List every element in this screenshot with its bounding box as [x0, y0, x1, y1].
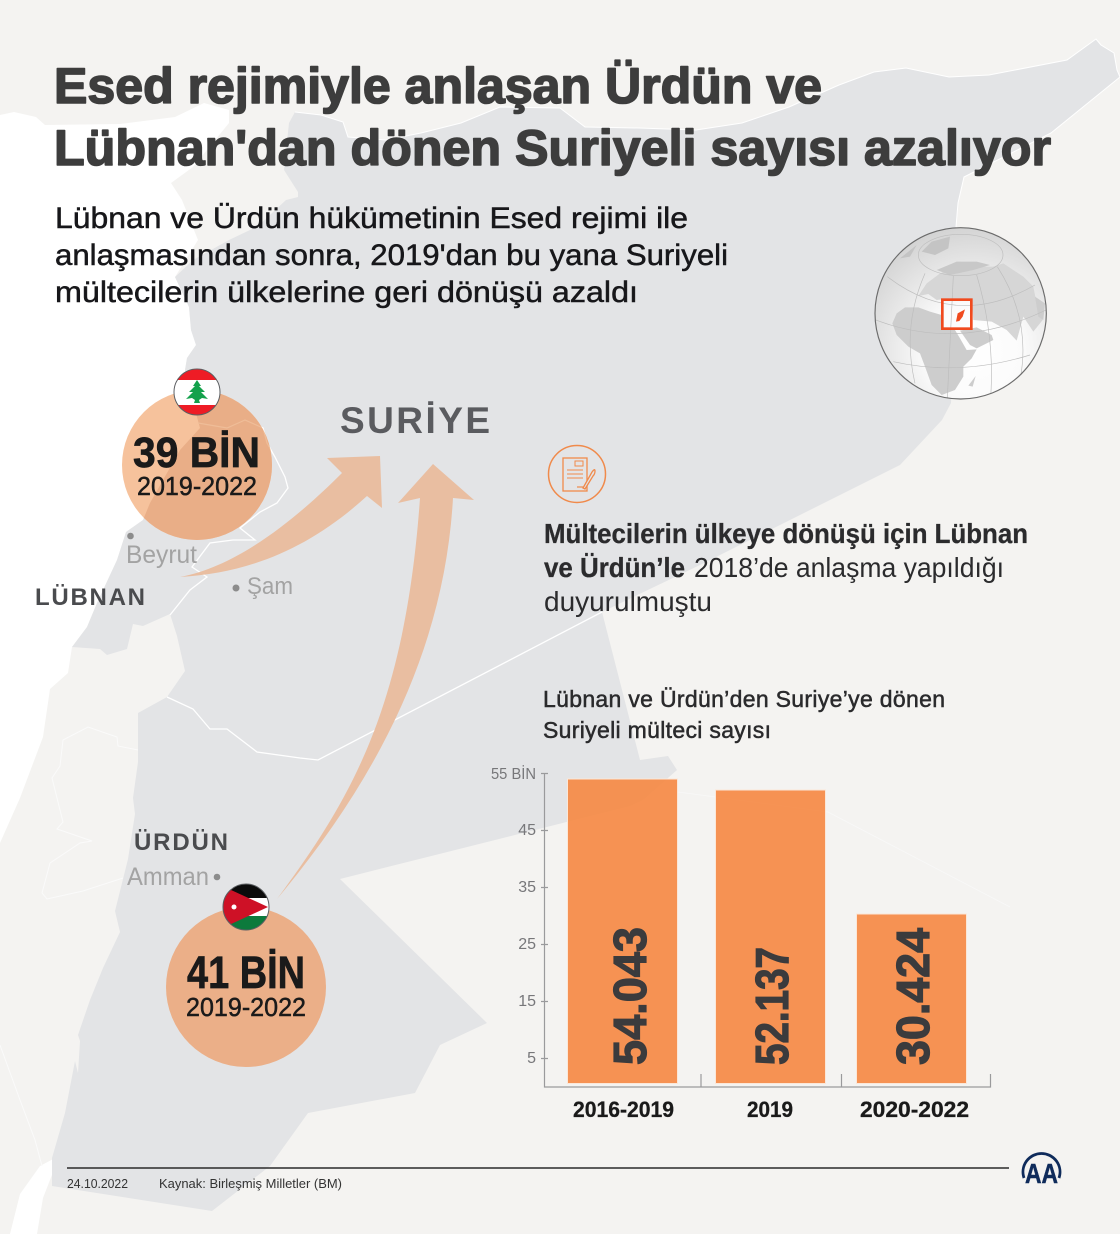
axis values: [491, 764, 536, 1067]
callout text: duyurulmuştu: [544, 586, 712, 617]
category labels: 2020-2022: [860, 1097, 969, 1122]
label: Suriye: SURİYE: [340, 400, 490, 441]
bar values: 30.424: [887, 928, 939, 1065]
axis values: 5: [527, 1050, 536, 1067]
axis values: 25: [518, 936, 536, 953]
bubble: Lübnan 39 bin: 39 BİN: [133, 429, 260, 477]
axis values: 15: [518, 993, 536, 1010]
arrow: Ürdün to Suriye: [277, 464, 474, 899]
city: Amman: Amman: [127, 863, 209, 891]
title: Esed rejimiyle anlaşan Ürdün ve: [54, 58, 822, 114]
category labels: [573, 1097, 969, 1122]
axis values: 45: [518, 822, 536, 839]
bubble: Ürdün 41 bin: 2019-2022: [186, 992, 306, 1022]
bars: [568, 779, 966, 1084]
subtitle: anlaşmasından sonra, 2019'dan bu yana Suriyeli: [55, 239, 728, 272]
subtitle: Lübnan ve Ürdün hükümetinin Esed rejimi ile: [55, 202, 688, 235]
bubble: Ürdün 41 bin: 41 BİN: [187, 947, 305, 998]
axes and ticks: [541, 773, 990, 1087]
axis values: 35: [518, 879, 536, 896]
callout text: 2018’de anlaşma yapıldığı: [694, 552, 1004, 583]
bar values: 52.137: [746, 947, 798, 1065]
bubble: Lübnan 39 bin: [122, 394, 272, 540]
category labels: 2016-2019: [573, 1097, 674, 1122]
globe locator: [875, 228, 1046, 399]
gulf of Aqaba: [10, 1158, 57, 1234]
footer: Kaynak: Birleşmiş Milletler (BM): [159, 1176, 342, 1191]
city: Şam: Şam: [247, 573, 293, 600]
arrow: Lübnan to Suriye: [180, 456, 382, 577]
bubble: Ürdün 41 bin: [166, 907, 326, 1067]
title: [54, 58, 1051, 176]
bar values: 54.043: [604, 927, 656, 1065]
flag: Lübnan: [174, 369, 220, 415]
sea: [0, 103, 229, 843]
chart title: Lübnan ve Ürdün’den Suriye’ye dönen: [543, 686, 945, 712]
axis values: 55 BİN: [491, 764, 536, 783]
globe graticule: [876, 234, 1046, 398]
bar values: [604, 927, 939, 1065]
flag: Ürdün: [218, 884, 269, 931]
title: Lübnan'dan dönen Suriyeli sayısı azalıyor: [54, 120, 1051, 176]
footer: 24.10.2022: [67, 1176, 128, 1191]
callout text: Mültecilerin ülkeye dönüşü için Lübnan: [544, 518, 1028, 549]
label: Lübnan: LÜBNAN: [35, 584, 145, 611]
bubble: Lübnan 39 bin: 2019-2022: [137, 471, 257, 501]
city: Beyrut: Beyrut: [126, 541, 197, 569]
globe land: [892, 237, 1045, 395]
label: Ürdün: ÜRDÜN: [134, 829, 228, 856]
icon: document and pen: [548, 446, 606, 502]
logo: AA: AA: [1025, 1158, 1058, 1189]
bar chart: [491, 764, 990, 1122]
chart title: [543, 686, 945, 743]
subtitle: mültecilerin ülkelerine geri dönüşü azaldı: [55, 276, 638, 309]
subtitle: [55, 202, 728, 309]
chart title: Suriyeli mülteci sayısı: [543, 717, 771, 743]
red locator box: [942, 300, 971, 329]
category labels: 2019: [747, 1097, 793, 1122]
callout text: ve Ürdün’le: [544, 552, 685, 583]
callout text: [544, 518, 1028, 617]
footer: [67, 1168, 1009, 1191]
